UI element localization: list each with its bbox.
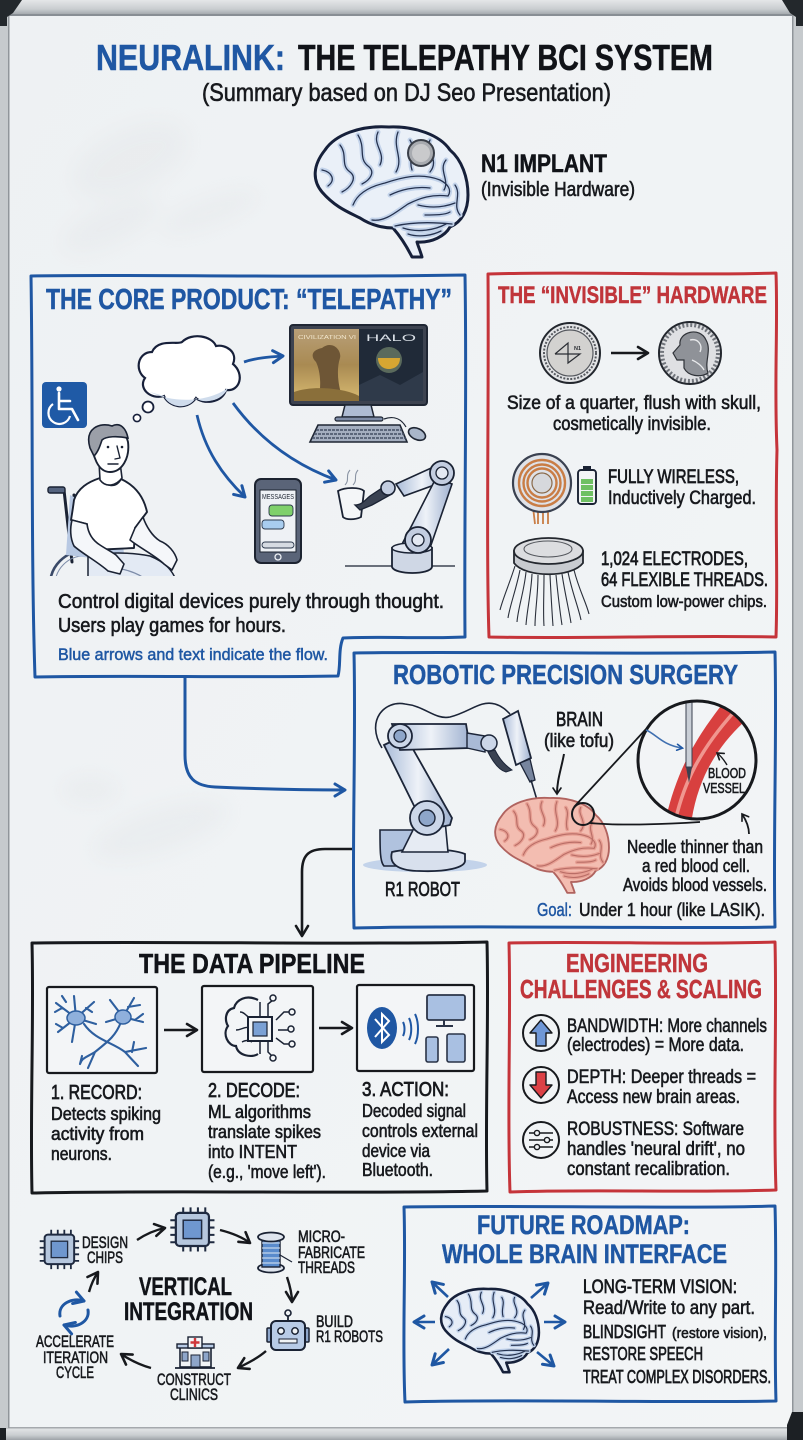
icon: design chip	[40, 1230, 79, 1269]
needle note: Avoids blood vessels.	[623, 874, 767, 895]
robot arm with cup	[338, 461, 455, 573]
text: long-term vision: Read/Write to any part.	[583, 1298, 755, 1319]
label: build R1 robots	[316, 1313, 383, 1346]
text: electrodes and threads	[601, 549, 768, 611]
box: bluetooth devices	[357, 985, 474, 1071]
icon: fabricated chip	[170, 1207, 214, 1251]
step 2 text: ML algorithms	[208, 1102, 311, 1122]
arrow: implant to quarter	[611, 352, 648, 354]
icon: clinic	[175, 1337, 215, 1368]
text: fully wireless: FULLY WIRELESS,	[608, 467, 739, 488]
needle	[531, 780, 543, 820]
icon: wheelchair accessibility	[42, 382, 87, 428]
heading	[442, 1210, 727, 1269]
text: long-term vision: BLINDSIGHT	[583, 1322, 666, 1342]
blood vessel label	[703, 766, 746, 797]
title: NEURALINK:	[96, 37, 285, 78]
phone with messages: MESSAGES	[262, 492, 294, 501]
arrow: cloud to phone	[197, 415, 245, 497]
icon: thread spool	[258, 1232, 292, 1272]
N1 implant label	[481, 150, 635, 201]
label: construct clinics: CLINICS	[170, 1386, 218, 1404]
text: depth: DEPTH: Deeper threads =	[567, 1067, 756, 1088]
step 1 text	[51, 1082, 161, 1164]
label: construct clinics: CONSTRUCT	[157, 1371, 231, 1389]
step 3 text	[362, 1079, 478, 1180]
box: brain chip	[202, 986, 313, 1072]
step 1 text: Detects spiking	[51, 1104, 161, 1124]
text: size of a quarter: Size of a quarter, flush with skull,	[507, 393, 761, 414]
heading: THE CORE PRODUCT: “TELEPATHY”	[46, 284, 452, 316]
body text: Control digital devices purely through thought.	[58, 591, 444, 613]
monitor with games: CIVILIZATION VI	[298, 335, 357, 341]
label: build R1 robots: R1 ROBOTS	[316, 1328, 383, 1346]
label: design chips	[82, 1234, 128, 1267]
text: fully wireless: Inductively Charged.	[608, 488, 756, 509]
brain label	[544, 709, 614, 752]
icon: inductive coil and battery	[513, 454, 596, 524]
label: construct clinics	[157, 1371, 231, 1404]
step 2 text: (e.g., 'move left').	[208, 1162, 326, 1182]
arrow: record to decode	[164, 1029, 197, 1031]
panel: the invisible hardware	[488, 273, 777, 638]
R1 robot label: R1 ROBOT	[385, 879, 460, 901]
needle note: Needle thinner than	[627, 836, 763, 857]
subtitle: (Summary based on DJ Seo Presentation)	[202, 79, 611, 107]
label: micro-fabricate threads: FABRICATE	[298, 1244, 365, 1262]
label: design chips: CHIPS	[87, 1249, 123, 1267]
step 2 text: 2. DECODE:	[208, 1080, 300, 1102]
panel: the data pipeline	[31, 942, 488, 1193]
label: design chips: DESIGN	[82, 1234, 128, 1252]
person in wheelchair	[47, 424, 178, 576]
step 2 text	[208, 1080, 326, 1182]
text: depth	[567, 1067, 756, 1108]
panel: the core product telepathy	[31, 275, 466, 677]
heading: VERTICAL	[139, 1273, 232, 1301]
label: accelerate iteration cycle: ACCELERATE	[36, 1333, 114, 1351]
icon: brain with N1 implant	[315, 127, 468, 257]
icon: brain with radiating arrows	[414, 1282, 565, 1372]
arrow: decode to action	[319, 1027, 352, 1029]
cycle arrows	[89, 1228, 292, 1368]
heading	[520, 948, 762, 1004]
magnifier on blood vessel	[572, 695, 756, 825]
step 3 text: 3. ACTION:	[362, 1079, 449, 1101]
step 1 text: 1. RECORD:	[51, 1082, 142, 1104]
step 2 text: into INTENT	[208, 1142, 297, 1162]
thought cloud	[133, 336, 240, 422]
N1 implant label: (Invisible Hardware)	[481, 179, 635, 201]
text: long-term vision	[583, 1277, 771, 1387]
goal note: Under 1 hour (like LASIK).	[579, 899, 765, 920]
step 3 text: device via	[362, 1141, 431, 1161]
blood vessel label: BLOOD	[708, 766, 746, 782]
body text	[58, 591, 444, 637]
text: size of a quarter	[507, 393, 761, 435]
step 1 text: activity from	[51, 1124, 144, 1144]
vertical integration cycle	[36, 1207, 383, 1404]
pink brain	[495, 798, 609, 893]
text: long-term vision: RESTORE SPEECH	[583, 1344, 703, 1364]
title	[96, 37, 713, 78]
body text: Users play games for hours.	[58, 615, 286, 637]
arrow: cloud to robot arm	[233, 403, 336, 480]
text: long-term vision: LONG-TERM VISION:	[583, 1277, 737, 1298]
heading: WHOLE BRAIN INTERFACE	[442, 1239, 727, 1269]
label: micro-fabricate threads	[298, 1228, 365, 1277]
monitor with games	[290, 325, 427, 443]
panel: engineering challenges and scaling	[509, 942, 776, 1192]
panel: future roadmap	[404, 1206, 776, 1402]
monitor with games: HALO	[366, 333, 416, 343]
arrow: needle note to loupe	[742, 814, 749, 834]
icon: robustness sliders	[523, 1122, 559, 1158]
icon: depth down arrow	[523, 1067, 559, 1103]
icon: N1 coin: N1	[574, 346, 581, 352]
heading: ENGINEERING	[566, 948, 708, 978]
text: robustness	[567, 1119, 745, 1180]
label: accelerate iteration cycle: CYCLE	[56, 1364, 94, 1382]
text: electrodes and threads: Custom low-power chips.	[601, 593, 767, 611]
needle note	[623, 836, 767, 895]
panel: robotic precision surgery	[353, 652, 776, 928]
arrow: label to brain	[557, 754, 564, 794]
text: depth: Access new brain areas.	[567, 1087, 740, 1108]
step 3 text: Bluetooth.	[362, 1160, 433, 1180]
blood vessel label: VESSEL	[703, 781, 745, 797]
text: bandwidth: (electrodes) = More data.	[567, 1035, 744, 1056]
text: fully wireless	[608, 467, 756, 509]
flow note: Blue arrows and text indicate the flow.	[58, 645, 328, 664]
icon: implant with threads	[500, 538, 589, 626]
label: micro-fabricate threads: MICRO-	[298, 1228, 345, 1246]
phone with messages	[255, 479, 301, 563]
text: long-term vision: (restore vision),	[672, 1325, 767, 1342]
icon: robot head	[267, 1310, 309, 1350]
text: size of a quarter: cosmetically invisible.	[553, 414, 711, 435]
icon: N1 coin	[540, 323, 600, 383]
heading	[124, 1273, 253, 1326]
step 3 text: Decoded signal	[362, 1101, 466, 1121]
heading: THE DATA PIPELINE	[139, 948, 365, 979]
R1 robot arm	[363, 703, 543, 872]
text: robustness: ROBUSTNESS: Software	[567, 1119, 744, 1140]
N1 implant label: N1 IMPLANT	[481, 150, 607, 178]
label: accelerate iteration cycle	[36, 1333, 114, 1382]
arrow: core product to surgery	[185, 677, 345, 790]
goal note: Goal:	[537, 899, 572, 920]
icon: bandwidth up arrow	[523, 1015, 559, 1051]
arrow: cloud to monitor	[244, 356, 283, 362]
label: micro-fabricate threads: THREADS	[298, 1259, 355, 1277]
icon: quarter coin	[659, 322, 721, 384]
label: accelerate iteration cycle: ITERATION	[43, 1349, 108, 1367]
arrow: surgery to data pipeline	[302, 849, 352, 936]
box: neurons	[47, 987, 157, 1073]
needle note: a red blood cell.	[642, 855, 750, 876]
heading: FUTURE ROADMAP:	[477, 1210, 690, 1240]
text: bandwidth	[567, 1016, 767, 1056]
label: build R1 robots: BUILD	[316, 1313, 353, 1331]
text: robustness: constant recalibration.	[567, 1159, 730, 1180]
title: THE TELEPATHY BCI SYSTEM	[298, 37, 713, 78]
heading: INTEGRATION	[124, 1298, 253, 1326]
brain label: BRAIN	[556, 709, 603, 731]
step 1 text: neurons.	[51, 1144, 112, 1164]
brain label: (like tofu)	[544, 731, 614, 752]
step 2 text: translate spikes	[208, 1122, 321, 1142]
step 3 text: controls external	[362, 1121, 478, 1141]
text: electrodes and threads: 1,024 ELECTRODES,	[601, 549, 748, 570]
text: robustness: handles 'neural drift', no	[567, 1139, 745, 1160]
icon: iteration cycle	[60, 1300, 88, 1326]
